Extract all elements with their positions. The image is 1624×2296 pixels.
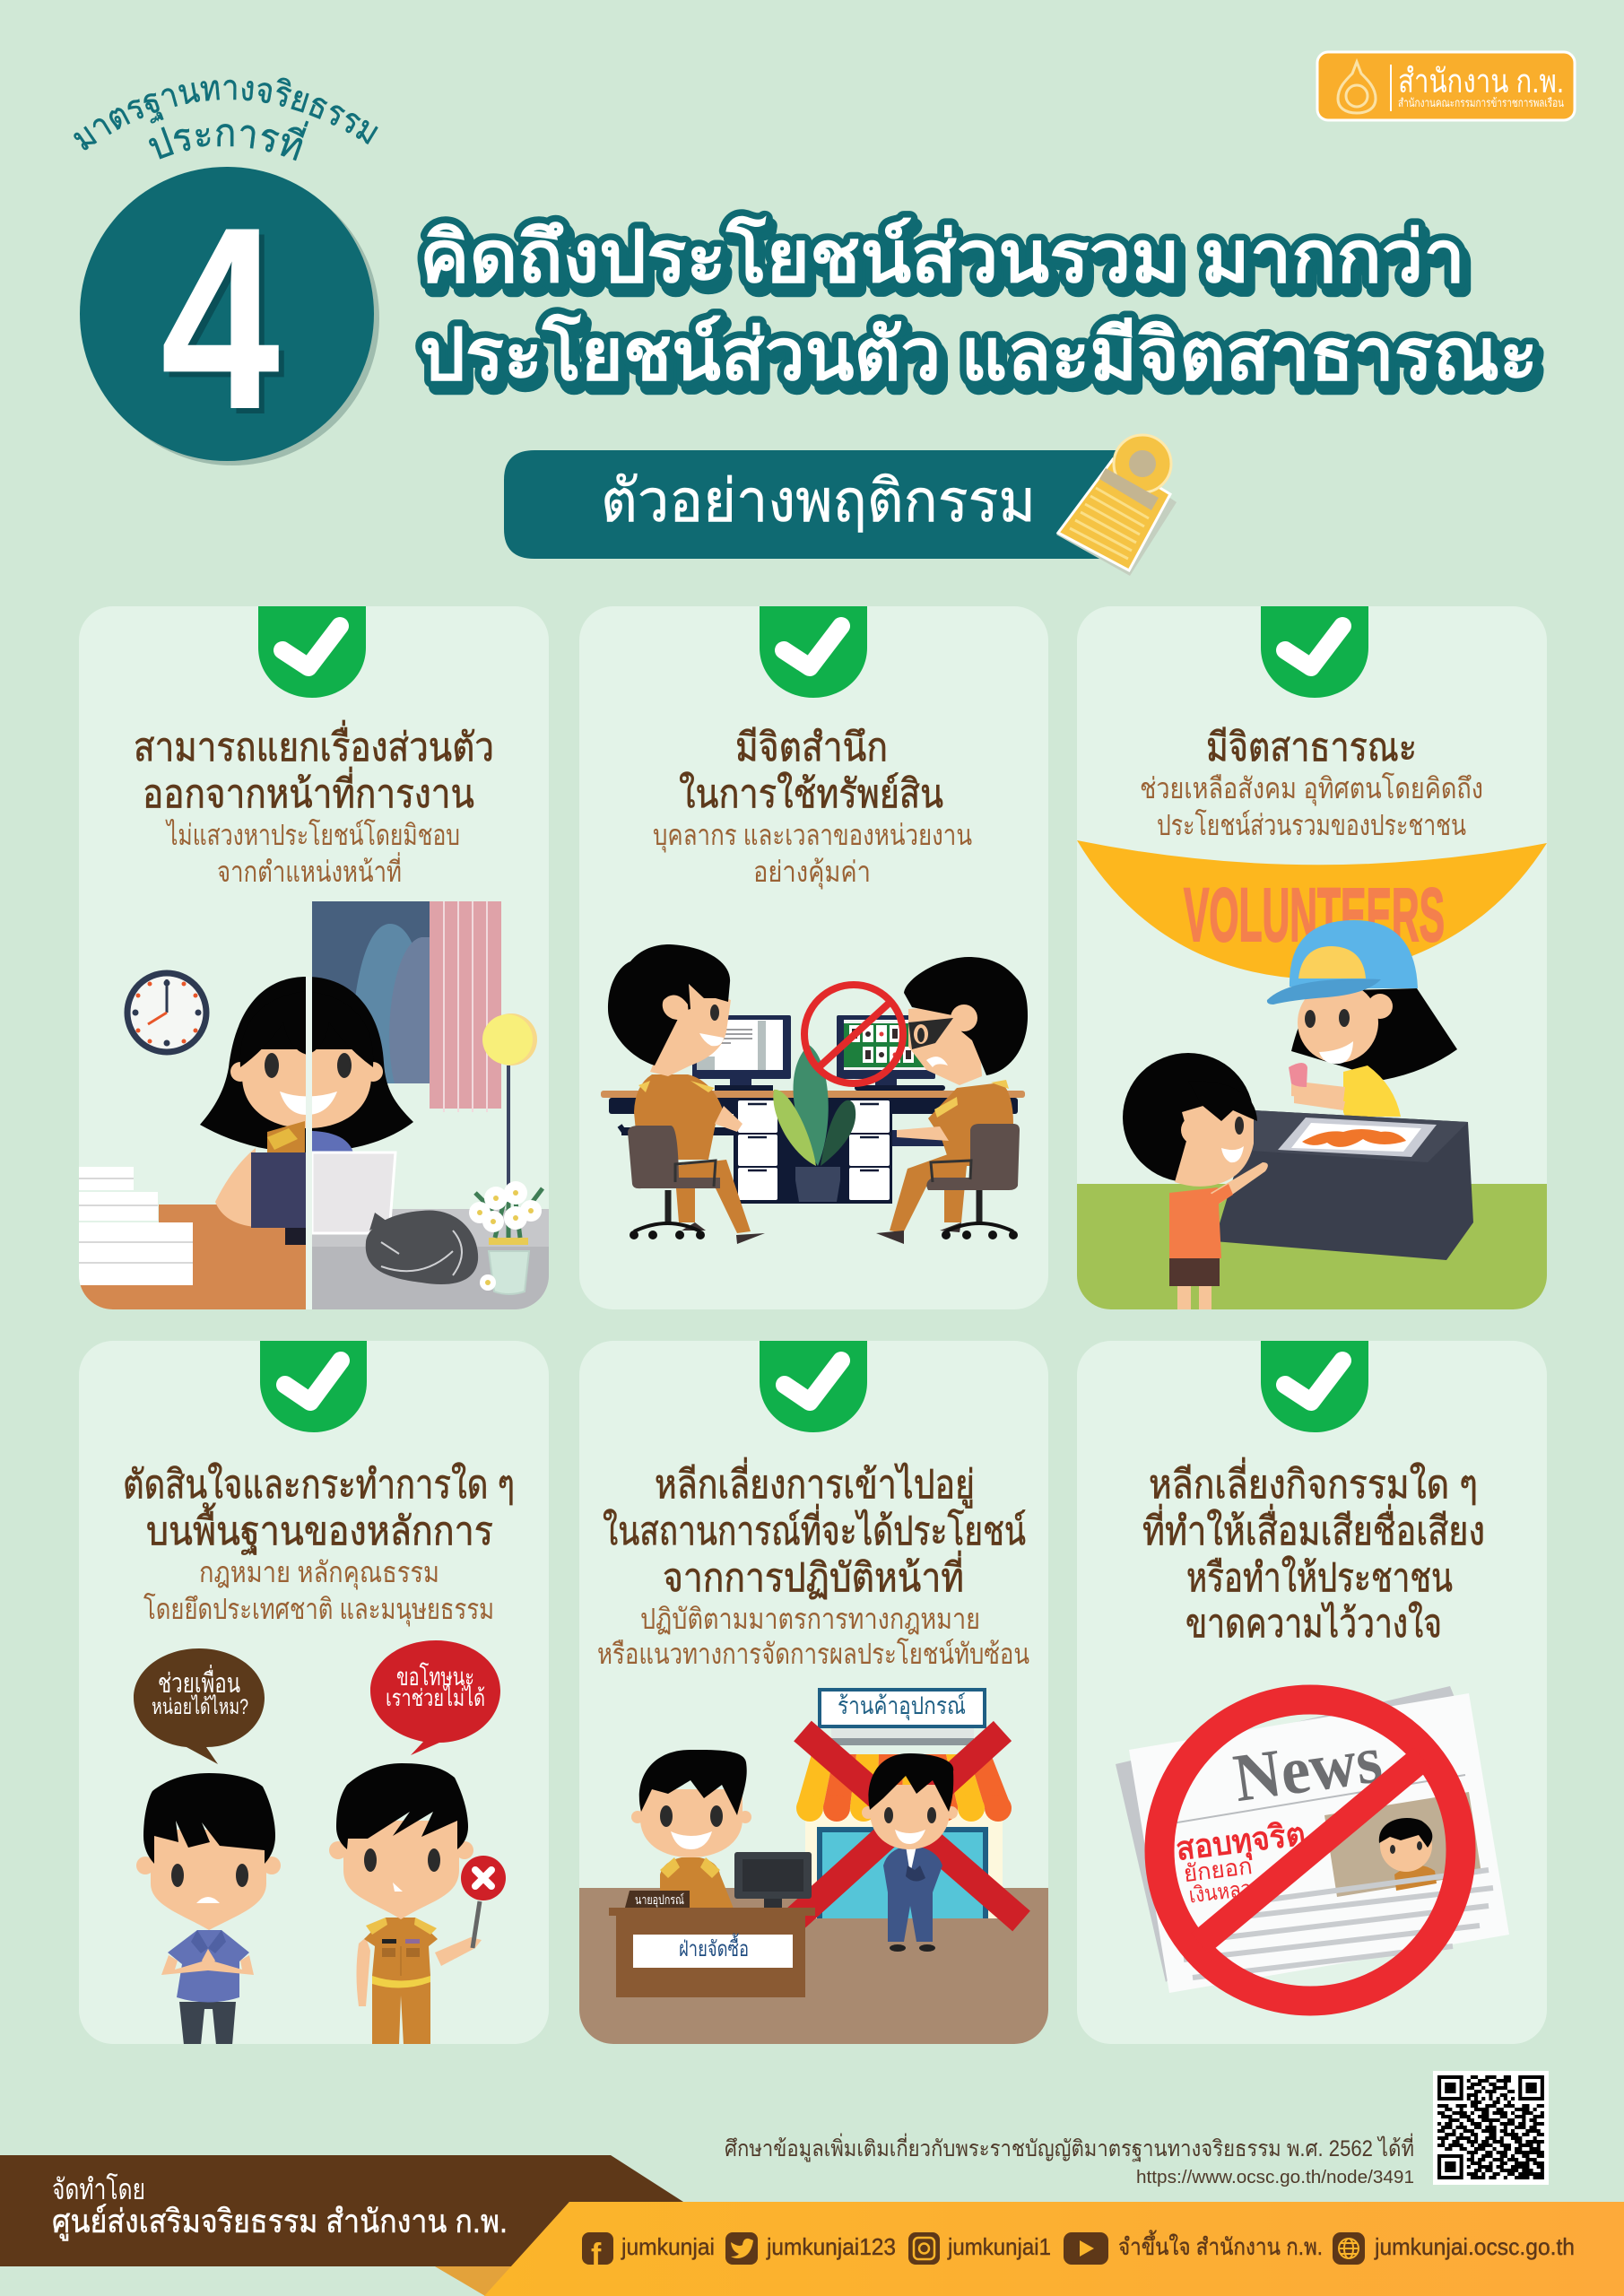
speech bubble: refusal: ขอโทษนะ bbox=[396, 1662, 474, 1691]
card 5 description: หรือแนวทางการจัดการผลประโยชน์ทับซ้อน bbox=[597, 1638, 1029, 1670]
icon: youtube bbox=[1064, 2232, 1108, 2265]
card 6 heading: หลีกเลี่ยงกิจกรรมใด ๆ bbox=[1149, 1457, 1478, 1507]
card 6 heading: ที่ทำให้เสื่อมเสียชื่อเสียง bbox=[1142, 1503, 1485, 1553]
illustration: newspaper with prohibition sign: ยักยอก bbox=[1182, 1852, 1254, 1887]
figure: officer holding stop sign bbox=[329, 1763, 506, 2045]
icon: facebook: f bbox=[591, 2238, 602, 2272]
card 4 description: โดยยึดประเทศชาติ และมนุษยธรรม bbox=[143, 1593, 494, 1627]
speech bubble: asking for a favour bbox=[134, 1648, 265, 1764]
footer: social links: jumkunjai bbox=[621, 2233, 715, 2260]
illustration: newspaper with prohibition sign: News bbox=[1229, 1721, 1386, 1816]
title: ประโยชน์ส่วนตัว และมีจิตสาธารณะ bbox=[420, 312, 1538, 395]
further reading note: https://www.ocsc.go.th/node/3491 bbox=[1136, 2168, 1414, 2187]
footer: producer band: จัดทำโดย bbox=[52, 2173, 145, 2205]
card 4 description: กฎหมาย หลักคุณธรรม bbox=[199, 1556, 439, 1590]
card 6 heading: หรือทำให้ประชาชน bbox=[1186, 1555, 1453, 1600]
illustration: officer, shop and salesman crossed out bbox=[579, 1690, 1048, 2045]
number badge: 4: 4 bbox=[161, 173, 282, 464]
illustration: newspaper with prohibition sign: เงินหลวง bbox=[1187, 1875, 1262, 1909]
card 4 description bbox=[143, 1556, 494, 1627]
title: ประโยชน์ส่วนตัว และมีจิตสาธารณะ bbox=[424, 319, 1542, 402]
panel: card 5 avoid conflict of interest bbox=[579, 1341, 1048, 2045]
card 5 description bbox=[597, 1603, 1029, 1670]
banner: behaviour examples bbox=[504, 450, 1125, 559]
icon: twitter bbox=[725, 2232, 758, 2265]
panel: card 1 separate personal matters bbox=[79, 606, 549, 1309]
card 4 heading: บนพื้นฐานของหลักการ bbox=[146, 1502, 493, 1554]
illustration: newspaper with prohibition sign bbox=[1116, 1686, 1509, 2001]
footer: social links: jumkunjai.ocsc.go.th bbox=[1374, 2233, 1575, 2260]
card 4 heading: ตัดสินใจและกระทำการใด ๆ bbox=[123, 1462, 515, 1507]
icon: yellow tag bbox=[1056, 435, 1177, 576]
card 5 heading: หลีกเลี่ยงการเข้าไปอยู่ bbox=[655, 1457, 975, 1509]
shield check 4 bbox=[260, 1341, 367, 1432]
card 1 description bbox=[165, 819, 460, 888]
shield check 1 bbox=[258, 606, 366, 698]
card 1 heading: ออกจากหน้าที่การงาน bbox=[143, 766, 474, 816]
card 5 heading: ในสถานการณ์ที่จะได้ประโยชน์ bbox=[603, 1503, 1026, 1553]
panel: card 3 public mind bbox=[1077, 606, 1547, 1309]
banner: behaviour examples: ตัวอย่างพฤติกรรม bbox=[601, 467, 1036, 534]
card 3 description: ช่วยเหลือสังคม อุทิศตนโดยคิดถึง bbox=[1140, 772, 1483, 806]
illustration: officers at desks with forbidden card game bbox=[601, 944, 1028, 1244]
curved heading: standard number: ประการที่ bbox=[149, 120, 308, 161]
icon: website bbox=[1333, 2232, 1365, 2265]
card 1 heading: สามารถแยกเรื่องส่วนตัว bbox=[134, 719, 494, 770]
icon: instagram bbox=[908, 2232, 940, 2265]
figure: worried friend bbox=[136, 1773, 281, 2045]
further reading note bbox=[725, 2133, 1414, 2187]
card 3 description bbox=[1140, 772, 1483, 841]
card 3 heading: มีจิตสาธารณะ bbox=[1206, 726, 1417, 770]
card 2 heading bbox=[679, 726, 943, 816]
footer: producer band bbox=[0, 2155, 683, 2266]
curved heading: standard number: มาตรฐานทางจริยธรรม bbox=[74, 77, 378, 151]
footer: orange social band accent bbox=[435, 2266, 515, 2296]
card 2 description bbox=[653, 819, 972, 890]
shield check 3 bbox=[1261, 606, 1368, 698]
illustration: two sides of an officer bbox=[79, 901, 549, 1309]
illustration: officer, shop and salesman crossed out: ฝ่ายจัดซื้อ bbox=[679, 1933, 749, 1961]
logo: OCSC badge: สำนักงานคณะกรรมการข้าราชการพลเรือน bbox=[1398, 96, 1564, 109]
illustration: officer, shop and salesman crossed out: นายอุปกรณ์ bbox=[635, 1892, 684, 1908]
speech bubble: asking for a favour: หน่อยได้ไหม? bbox=[152, 1694, 248, 1719]
number badge: 4: 4 bbox=[166, 178, 287, 469]
card 5 heading bbox=[603, 1457, 1026, 1600]
card 4 heading bbox=[123, 1462, 515, 1554]
illustration: officer, shop and salesman crossed out: ร้านค้าอุปกรณ์ bbox=[838, 1692, 966, 1721]
title bbox=[420, 214, 1542, 402]
title: คิดถึงประโยชน์ส่วนรวม มากกว่า bbox=[424, 222, 1470, 304]
card 3 description: ประโยชน์ส่วนรวมของประชาชน bbox=[1157, 809, 1466, 841]
footer: social links bbox=[484, 2202, 1624, 2296]
card 1 description: ไม่แสวงหาประโยชน์โดยมิชอบ bbox=[165, 819, 460, 851]
card 2 description: อย่างคุ้มค่า bbox=[753, 856, 871, 890]
title: คิดถึงประโยชน์ส่วนรวม มากกว่า bbox=[420, 214, 1465, 297]
QR code bbox=[1433, 2071, 1549, 2185]
card 2 heading: ในการใช้ทรัพย์สิน bbox=[679, 771, 943, 816]
further reading note: ศึกษาข้อมูลเพิ่มเติมเกี่ยวกับพระราชบัญญัติมาตรฐานทางจริยธรรม พ.ศ. 2562 ได้ที่ bbox=[725, 2133, 1414, 2162]
speech bubble: refusal: เราช่วยไม่ได้ bbox=[386, 1684, 485, 1711]
speech bubble: asking for a favour: ช่วยเพื่อน bbox=[158, 1665, 240, 1699]
icon: facebook bbox=[582, 2232, 613, 2272]
card 1 heading bbox=[134, 719, 494, 816]
card 6 heading: ขาดความไว้วางใจ bbox=[1185, 1601, 1442, 1646]
panel: card 2 use of resources bbox=[579, 606, 1048, 1309]
logo: OCSC badge bbox=[1317, 52, 1575, 120]
footer: producer band: ศูนย์ส่งเสริมจริยธรรม สำนักงาน ก.พ. bbox=[52, 2203, 508, 2241]
speech bubble: refusal bbox=[370, 1640, 500, 1755]
illustration: volunteers serving food bbox=[1077, 840, 1547, 1309]
panel: card 6 avoid damaging reputation bbox=[1077, 1341, 1547, 2044]
number badge: 4 bbox=[80, 167, 379, 469]
shield check 2 bbox=[760, 606, 867, 698]
panel: card 4 decide on principles bbox=[79, 1341, 549, 2045]
card 2 description: บุคลากร และเวลาของหน่วยงาน bbox=[653, 819, 972, 853]
illustration: newspaper with prohibition sign: สอบทุจริต bbox=[1174, 1815, 1307, 1870]
card 1 description: จากตำแหน่งหน้าที่ bbox=[217, 852, 402, 888]
card 6 heading bbox=[1142, 1457, 1485, 1646]
shield check 6 bbox=[1261, 1341, 1368, 1432]
card 5 description: ปฏิบัติตามมาตรการทางกฎหมาย bbox=[640, 1603, 980, 1635]
footer: social links: จำขึ้นใจ สำนักงาน ก.พ. bbox=[1118, 2230, 1323, 2260]
shield check 5 bbox=[760, 1341, 867, 1432]
card 5 heading: จากการปฏิบัติหน้าที่ bbox=[663, 1550, 964, 1600]
footer: social links: jumkunjai1 bbox=[947, 2233, 1051, 2260]
footer: social links: jumkunjai123 bbox=[766, 2233, 896, 2260]
logo: OCSC badge: สำนักงาน ก.พ. bbox=[1398, 63, 1564, 100]
card 2 heading: มีจิตสำนึก bbox=[735, 726, 888, 770]
